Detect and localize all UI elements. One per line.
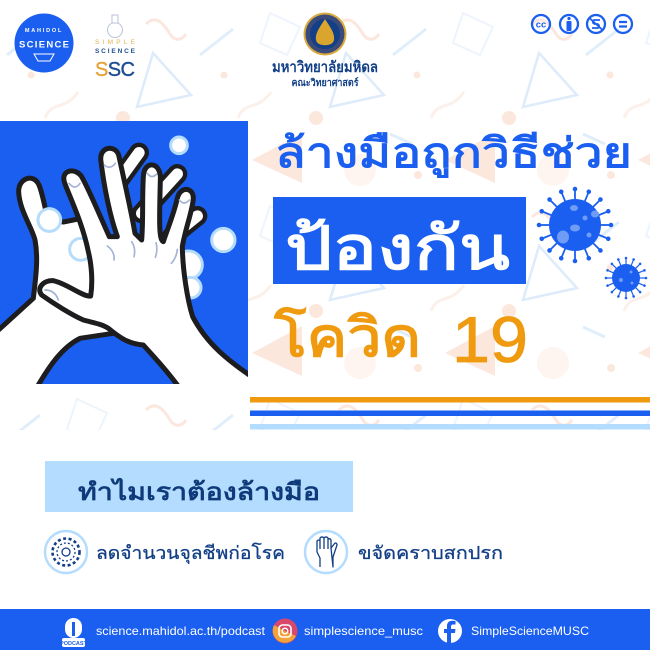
item: reduce pathogens	[45, 531, 285, 573]
icon: podcast	[60, 618, 88, 647]
divider stripes	[250, 397, 650, 430]
logo: Simple Science SSC	[95, 15, 136, 81]
item: remove dirt: ขจัดคราบสกปรก	[358, 543, 503, 563]
logo: Simple Science SSC: SIMPLE	[95, 39, 136, 46]
logo text: university name	[272, 58, 378, 89]
title line 3: 19	[452, 303, 528, 376]
logo: Simple Science SSC: SCIENCE	[95, 48, 136, 55]
title line 1: ล้างมือถูกวิธีช่วย	[275, 130, 632, 178]
title box	[273, 197, 526, 284]
icon: small virus	[605, 257, 647, 299]
logo: Mahidol Science: SCIENCE	[19, 40, 69, 50]
logo: Simple Science SSC: SSC	[95, 59, 135, 81]
logo: Mahidol Science: MAHIDOL	[25, 28, 63, 34]
logo text: university name: คณะวิทยาศาสตร์	[292, 77, 359, 89]
back hand fingers	[113, 153, 197, 237]
bubbles behind the hands	[171, 137, 235, 298]
item: reduce pathogens: ลดจำนวนจุลชีพก่อโรค	[96, 542, 285, 564]
finger detail lines	[45, 163, 189, 300]
bubbles on the back hand	[38, 209, 61, 231]
title box: ป้องกัน	[285, 215, 510, 282]
footer bar	[0, 609, 650, 650]
logo text: university name: มหาวิทยาลัยมหิดล	[272, 58, 378, 76]
icons: creative commons licence	[532, 15, 632, 33]
link: instagram handle: simplescience_musc	[304, 624, 423, 638]
icons: creative commons licence: cc	[536, 20, 546, 30]
icon: podcast: PODCAST	[60, 641, 88, 647]
icon: facebook	[438, 619, 462, 643]
title line 3: โควิด	[274, 307, 421, 368]
panel: hand washing illustration	[0, 121, 257, 400]
heading: why wash hands	[45, 461, 353, 512]
icon: instagram	[272, 618, 298, 644]
item: remove dirt	[305, 531, 503, 573]
link: facebook page: SimpleScienceMUSC	[471, 624, 589, 638]
link: podcast url: science.mahidol.ac.th/podcast	[96, 624, 266, 638]
front hand	[40, 148, 257, 400]
heading: why wash hands: ทำไมเราต้องล้างมือ	[78, 477, 320, 506]
title line 3	[274, 303, 528, 376]
background pattern	[0, 0, 650, 430]
logo: Mahidol Science	[14, 14, 74, 72]
back hand	[0, 178, 113, 397]
logo: Mahidol University seal	[304, 12, 346, 56]
icon: large virus	[537, 187, 613, 263]
